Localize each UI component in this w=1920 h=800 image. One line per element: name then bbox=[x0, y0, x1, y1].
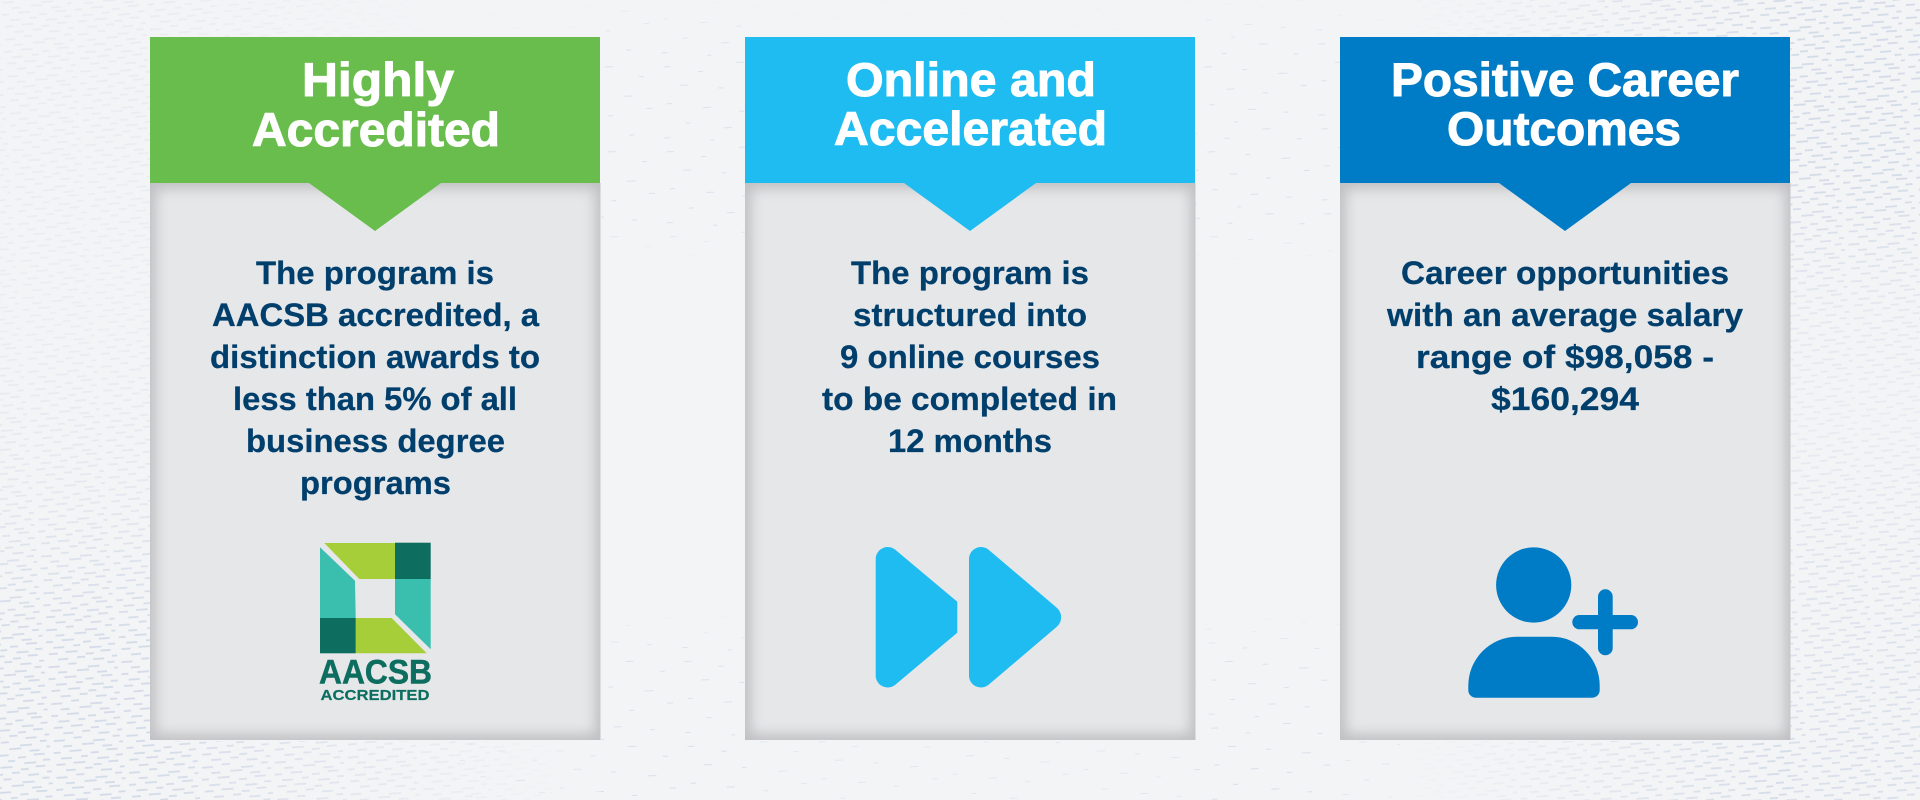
heading: positive career outcomes: Positive Career bbox=[1391, 53, 1739, 106]
text block: accreditation description: business degree bbox=[246, 423, 505, 459]
panel: online and accelerated bbox=[745, 37, 1196, 740]
text block: accreditation description: AACSB accredited, a bbox=[212, 297, 539, 333]
icon: person with plus bbox=[1468, 547, 1638, 698]
text block: program structure description: to be completed in bbox=[822, 381, 1117, 417]
heading: highly accredited: Accredited bbox=[252, 103, 500, 156]
text block: salary description: range of $98,058 - bbox=[1416, 339, 1714, 375]
text block: salary description: with an average salary bbox=[1386, 297, 1743, 333]
text block: accreditation description bbox=[210, 255, 540, 501]
text block: accreditation description: less than 5% of all bbox=[233, 381, 517, 417]
icon: AACSB accredited logo bbox=[319, 543, 432, 704]
text block: program structure description: 12 months bbox=[888, 423, 1052, 459]
text block: program structure description: The program is bbox=[851, 255, 1089, 291]
heading: online and accelerated: Online and bbox=[846, 53, 1096, 106]
text block: accreditation description: The program is bbox=[256, 255, 494, 291]
heading: highly accredited: Highly bbox=[302, 53, 454, 106]
heading: positive career outcomes bbox=[1340, 37, 1790, 231]
text block: salary description: $160,294 bbox=[1491, 381, 1639, 417]
heading: online and accelerated: Accelerated bbox=[834, 102, 1107, 155]
heading: positive career outcomes: Outcomes bbox=[1447, 102, 1681, 155]
heading: online and accelerated bbox=[745, 37, 1195, 231]
text block: program structure description: 9 online courses bbox=[840, 339, 1100, 375]
icon: AACSB accredited logo: ACCREDITED bbox=[320, 688, 430, 704]
icon: AACSB accredited logo: AACSB bbox=[319, 653, 432, 691]
text block: program structure description: structured into bbox=[853, 297, 1087, 333]
icon: fast forward bbox=[876, 547, 1061, 687]
text block: salary description bbox=[1386, 255, 1743, 417]
panel: highly accredited bbox=[150, 37, 600, 740]
text block: salary description: Career opportunities bbox=[1401, 255, 1729, 291]
panel: positive career outcomes bbox=[1340, 37, 1790, 740]
text block: program structure description bbox=[822, 255, 1117, 459]
text block: accreditation description: programs bbox=[300, 465, 451, 501]
text block: accreditation description: distinction awards to bbox=[210, 339, 540, 375]
heading: highly accredited bbox=[150, 37, 600, 231]
